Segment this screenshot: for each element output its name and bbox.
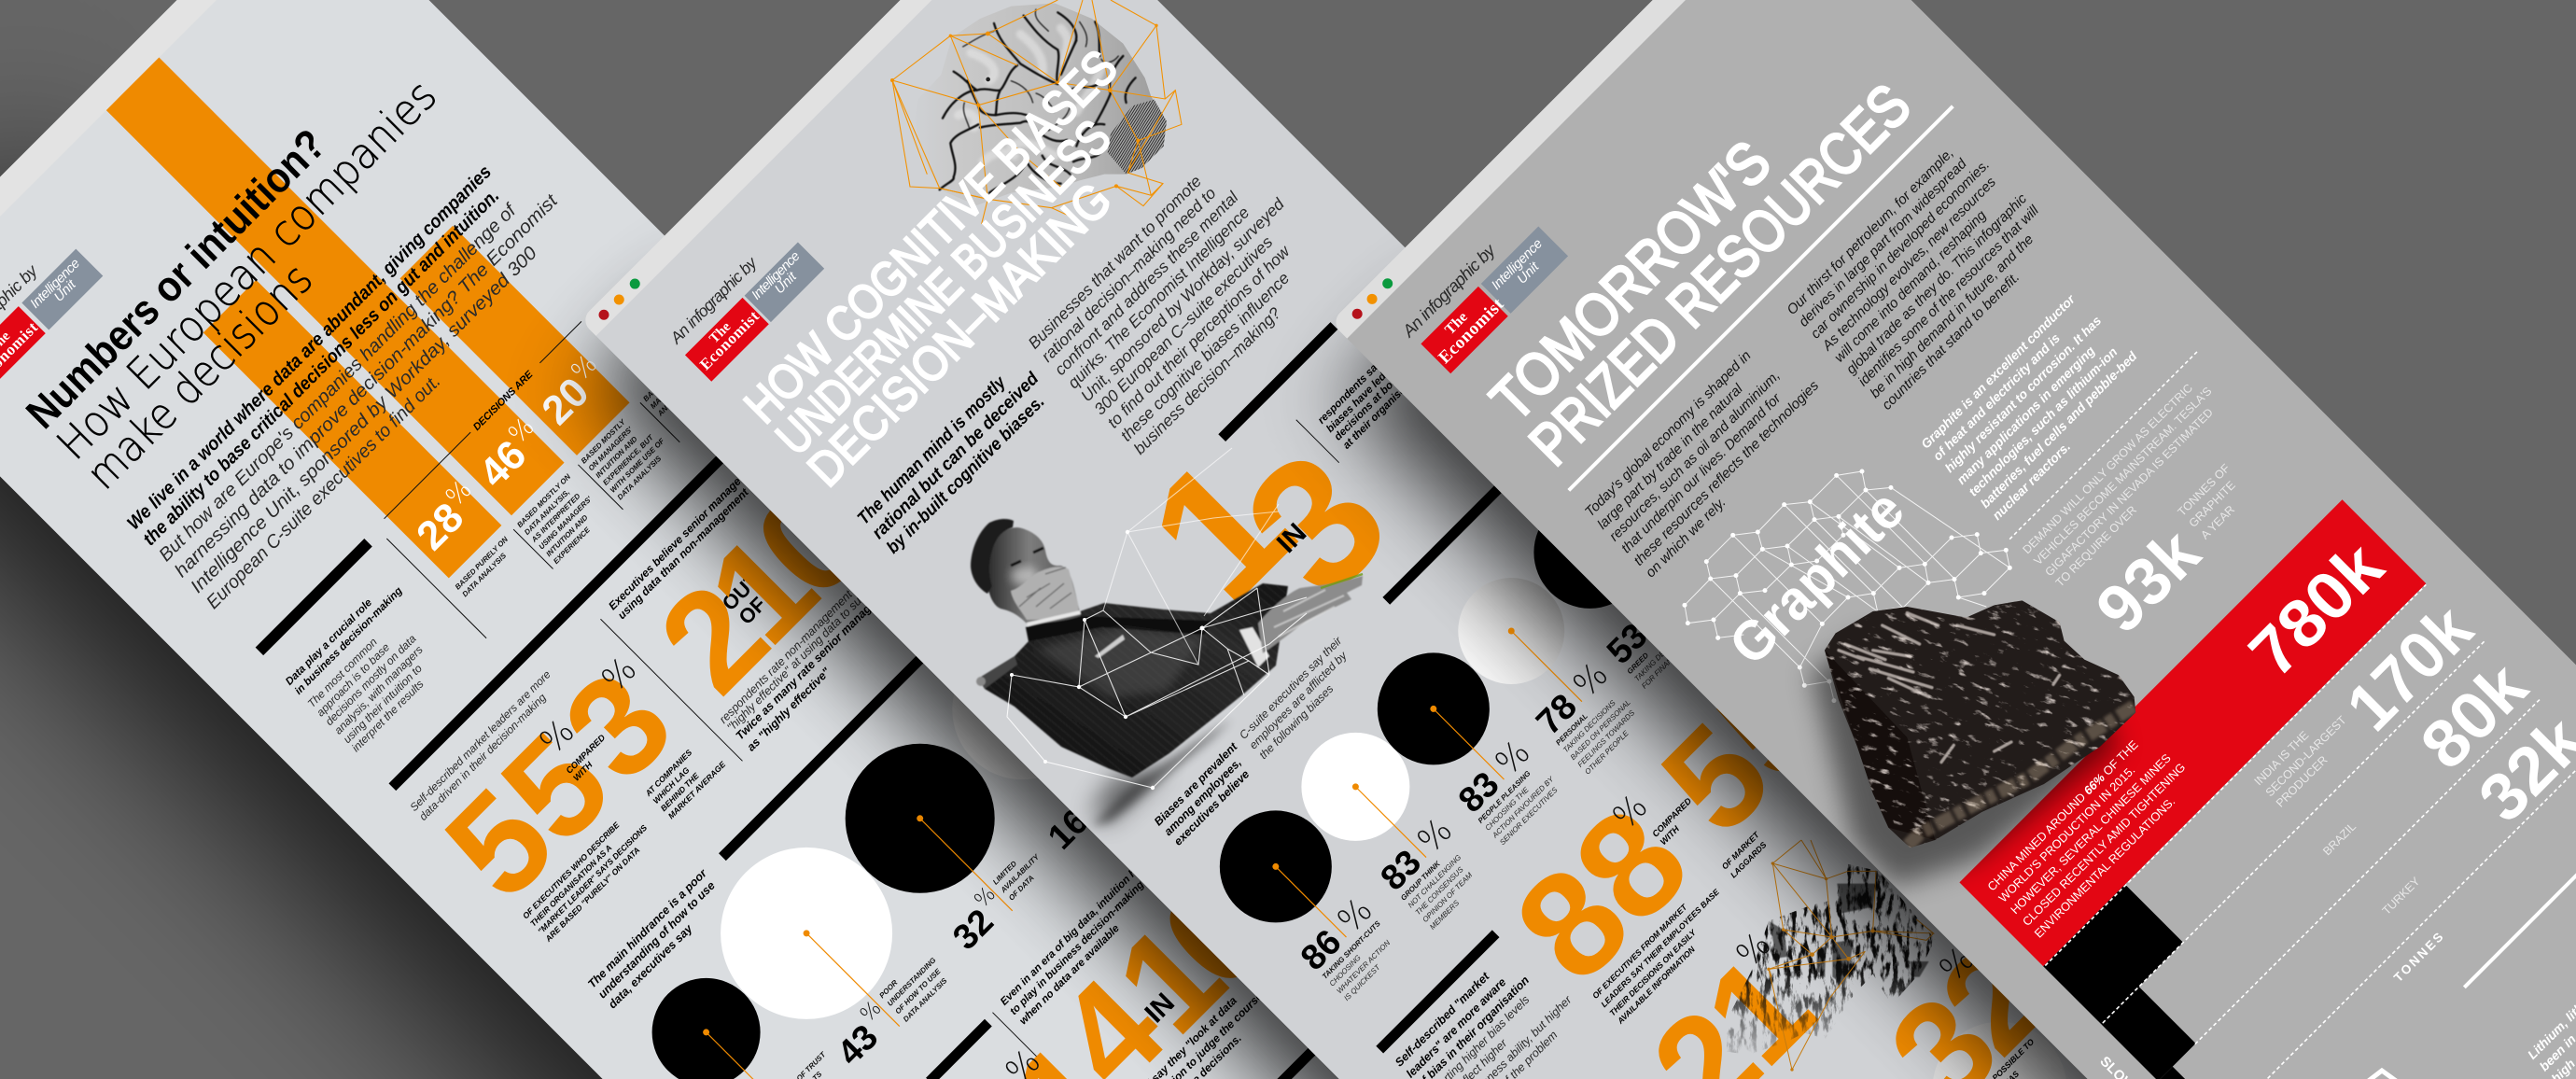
big stat: 21 percent: %: [1729, 925, 1779, 974]
big stat: 32 percent: 2: [1911, 915, 2079, 1079]
title: make decisions: [77, 254, 322, 499]
image: mountain: [1727, 840, 1935, 1072]
page background: [1331, 0, 2576, 1079]
chart: bias circles: %: [1331, 890, 1380, 941]
text: data play a crucial role: [284, 576, 462, 754]
text: market leaders aware: Self-described "market: [1393, 969, 1492, 1070]
chart: bias circles: 83: [1451, 764, 1507, 820]
labels: bias names: FEELINGS TOWARDS: [1576, 708, 1637, 769]
text: intro: But how are Europe's companies handling the challenge of: [155, 199, 522, 566]
big stat: 55 compared with 3: "MARKET LEADER" SAYS DECISIONS: [536, 823, 649, 936]
labels: bias names: IS QUICKEST: [1342, 962, 1382, 1002]
big stat: 21 percent: [1622, 916, 1854, 1079]
browser bar: [581, 0, 1044, 336]
image: businessman: [971, 448, 1363, 826]
big stat: 2 out of 10: "highly effective" at using data to support: [724, 575, 883, 734]
big stat: 88 compared with 55: OF EXECUTIVES FROM MARKET: [1590, 902, 1689, 1001]
text: intro column one: resources, such as oil and aluminium,: [1606, 368, 1784, 544]
logo: Economist: Intelligence: [28, 256, 83, 312]
text: graphite description: highly resistant to corrosion. It has: [1942, 314, 2104, 475]
big stat: 1 in 3: IN: [1271, 517, 1312, 559]
stat row: Turkey 32k: TURKEY: [2380, 875, 2423, 918]
text: intro: the ability to base critical decisions less on gut and intuition.: [139, 186, 504, 550]
text: data play a crucial role: Data play a crucial role: [284, 596, 375, 688]
title: UNDERMINE BUSINESS: [766, 110, 1121, 466]
big stat: 55 compared with 3: BEHIND THE: [659, 770, 702, 813]
labels: bias names: OTHER PEOPLE: [1583, 729, 1631, 777]
big stat: 55 compared with 3: THEIR ORGANISATION AS A: [528, 843, 614, 929]
text: data play a crucial role: using their intuition to: [341, 662, 425, 746]
chart: hindrance circles: OF HOW TO USE: [893, 967, 943, 1016]
captions under bars: DATA ANALYSIS,: [523, 488, 571, 537]
text: intro column two: global trade as they do. This infographic: [1843, 190, 2030, 377]
big stat: 2 out of 10: respondents rate non-management as: [717, 577, 866, 726]
big stat: 55 compared with 3: MARKET AVERAGE: [666, 759, 728, 820]
big stat: 88 compared with 55: [1484, 637, 1876, 1029]
logo: Economist: [685, 243, 824, 382]
text: graphite description: many applications in emerging: [1954, 343, 2098, 487]
big stat: 55 compared with 3: %: [533, 712, 582, 762]
thin divider: [992, 1013, 1112, 1079]
text: intro: Unit, sponsored by Workday, surveyed: [1077, 194, 1289, 405]
thick divider: [388, 456, 723, 791]
title: PRIZED RESOURCES: [1517, 71, 1924, 478]
text: main hindrance: understanding of how to use: [595, 879, 718, 1001]
labels: bias names: CHOOSING: [1328, 953, 1363, 988]
text: market leaders aware: [1393, 940, 1585, 1079]
text: data play a crucial role: in business decision-making: [293, 585, 405, 697]
captions under bars: ON MANAGERS': [587, 425, 635, 472]
big stat: 32 percent: %: [1932, 940, 1982, 989]
thick divider: [256, 539, 372, 655]
text: intro: 300 European C–suite executives: [1090, 232, 1277, 418]
text: graphite description: technologies, such as lithium-ion: [1966, 344, 2121, 499]
big stat: 55 compared with 3: OF EXECUTIVES WHO DESCRIBE: [521, 820, 622, 920]
big stat: 2 out of 10: 1: [679, 505, 847, 673]
labels: bias names: GREED: [1626, 651, 1650, 676]
panel: tomorrow's prized resources page: [1207, 0, 2576, 1079]
dashed rows: [2045, 584, 2576, 1079]
big stat: 2 out of 10: as "highly effective": [745, 665, 833, 754]
divider with heading: decisions are: [381, 318, 586, 524]
text: respondents say: respondents say: [1316, 357, 1385, 427]
big stat: 2 out of 10: using data than non-management: [615, 485, 751, 622]
big stat: 88 compared with 55: 5: [1687, 639, 1855, 807]
text: market leaders aware: leaders" are more aware: [1404, 975, 1508, 1079]
graphic: hexagon mesh: [1685, 471, 2009, 701]
big stat: 55 compared with 3: 5: [415, 760, 583, 928]
panel: cognitive biases page: [517, 0, 2493, 1079]
text: graphite description: of heat and electricity and is: [1930, 330, 2063, 463]
chart: bias circles: [1197, 473, 1708, 985]
big stat: 4 in 10: 1: [1086, 894, 1254, 1062]
logo: Economist: Unit: [772, 269, 801, 297]
captions under bars: BASED MOSTLY: [580, 417, 627, 466]
captions under bars: DATA ANALYSIS: [616, 454, 664, 501]
labels: bias names: MEMBERS: [1428, 898, 1462, 932]
text: intro: We live in a world where data are abundant, giving companies: [123, 161, 496, 534]
big stat: 55 compared with 3: 3: [534, 642, 702, 810]
shadow of third page: [1343, 294, 2439, 1079]
text: respondents say: at their organisation: [1341, 371, 1421, 452]
chart: hindrance circles: OF DATA: [1007, 874, 1036, 903]
page background: [0, 0, 1338, 1079]
text: intro: Businesses that want to promote: [1024, 172, 1205, 353]
title: TOMORROW'S: [1477, 128, 1784, 434]
image: brain: [890, 0, 1182, 224]
text: biases are prevalent: executives believe: [1171, 767, 1253, 848]
text: data play a crucial role: interpret the results: [349, 678, 427, 754]
big stat: 88 compared with 55: LAGGARDS: [1729, 840, 1769, 880]
big stat: 55 compared with 3: 5: [472, 704, 640, 872]
text: human mind: rational but can be deceived: [869, 369, 1043, 543]
captions under bars: EXPERIENCE, BUT: [601, 432, 656, 487]
big stat: 2 out of 10: 0: [725, 458, 893, 626]
logo: Economist: Economist: [696, 307, 763, 373]
text: data play a crucial role: approach is to base: [314, 640, 392, 719]
text: intro column one: on which we rely.: [1643, 495, 1729, 581]
thick divider: [1218, 322, 1337, 441]
stat row: Brazil 80k: BRAZIL: [2320, 820, 2359, 858]
chart: hindrance circles: %: [856, 997, 887, 1027]
browser bar: [1331, 0, 1799, 339]
stat row: India 170k: [2249, 591, 2487, 829]
labels: bias names: ACTION FAVOURED BY: [1491, 775, 1556, 840]
text: intro column two: Our thirst for petroleum, for example,: [1784, 145, 1957, 318]
shadow behind first page: [0, 154, 1804, 1079]
disc behind 32 percent: [1905, 994, 2094, 1079]
stat row: India 170k: 170k: [2333, 591, 2487, 745]
text: intro: Intelligence Unit, sponsored by Workday, surveyed 300: [187, 243, 541, 597]
browser dots: [1350, 276, 1394, 321]
big stat: 55 compared with 3: ARE BASED "PURELY" ON DATA: [543, 846, 642, 945]
stat row: India 170k: PRODUCER: [2274, 753, 2330, 810]
big stat: 55 compared with 3: COMPARED: [565, 733, 608, 777]
big stat: 88 compared with 55: OF MARKET: [1720, 830, 1761, 871]
text: era of big data: when no data are available: [1017, 922, 1122, 1027]
text: data play a crucial role: analysis, with managers: [331, 643, 426, 736]
captions under bars: AS INTERPRETED: [529, 492, 582, 544]
text: main hindrance: The main hindrance is a poor: [585, 866, 710, 990]
logo: Economist: Intelligence: [749, 249, 804, 303]
shadow of second page: [587, 284, 2079, 1079]
labels: bias names: CHOOSING THE: [1484, 785, 1531, 833]
text: respondents say: biases have led to poor: [1324, 343, 1417, 435]
chart: hindrance circles: %: [970, 882, 1001, 913]
text: intro column two: identifies some of the resources that will: [1855, 203, 2042, 389]
labels: bias names: BASED ON PERSONAL: [1569, 698, 1632, 762]
text: china mined: CLOSED RECENTLY AMID TIGHTENING: [2020, 760, 2188, 929]
values: percentages: 20: [533, 369, 598, 434]
chart: hindrance circles: POOR: [877, 978, 900, 1000]
big stat: 55 compared with 3: %: [595, 650, 644, 700]
text: intro column one: large part by trade in the natural: [1594, 381, 1746, 533]
captions under bars: USING MANAGERS': [538, 494, 595, 551]
chart: bias circles: 83: [1373, 843, 1429, 898]
logo: Economist: Intelligence: [1489, 236, 1546, 293]
big stat: 4 in 10: 0: [1132, 849, 1300, 1017]
text: intro column two: derives in large part from widespread: [1796, 156, 1970, 330]
chart: hindrance circles: DATA ANALYSIS: [902, 976, 949, 1024]
title: How European companies: [47, 70, 446, 469]
red band: [1959, 499, 2426, 966]
text: biases are prevalent: Biases are prevalent: [1152, 739, 1240, 828]
chart: hindrance circles: 16: [1041, 802, 1097, 858]
values: percentages: 28: [408, 495, 472, 559]
image: graphite rock: [1718, 486, 2245, 957]
text: c-suite executives: employees are afflicted by: [1247, 649, 1350, 751]
text: market leaders: data-driven in their decision-making: [416, 691, 549, 823]
text: demand: GIGAFACTORY IN NEVADA IS ESTIMATED: [2042, 406, 2216, 579]
white marker: [2366, 1071, 2399, 1079]
text: intro: business decision–making?: [1130, 303, 1284, 458]
text: intro: rational decision–making need to: [1038, 183, 1220, 366]
thick divider: [1382, 485, 1502, 605]
stat: 780k: 780k: [2235, 528, 2399, 691]
text: china mined: CHINA MINED AROUND 66% OF THE: [1984, 737, 2141, 893]
logo: Economist: The: [707, 319, 735, 346]
labels: bias names: PERSONAL: [1554, 712, 1589, 747]
big stat: 1 in 3: 1: [1110, 419, 1331, 639]
big stat: 88 compared with 55: %: [1605, 787, 1656, 837]
labels: bias names: OPINION OF TEAM: [1421, 871, 1474, 924]
labels: bias names: [1321, 615, 1715, 1010]
labels: bias names: TAKING SHORT-CUTS: [1321, 918, 1382, 981]
values: percentages: %: [503, 412, 540, 450]
big stat: 4 in 10: [1015, 847, 1311, 1079]
big stat: 88 compared with 55: 5: [1632, 694, 1800, 862]
labels: bias names: PEOPLE PLEASING: [1477, 769, 1533, 825]
chart: bias circles: 78: [1529, 687, 1585, 742]
thin divider: [600, 619, 742, 761]
captions under bars: DATA ANALYSIS: [461, 551, 509, 598]
logo: Economist: The: [1442, 309, 1471, 338]
chart: hindrance circles: LIMITED: [991, 859, 1018, 887]
thick divider: [719, 656, 923, 861]
labels: bias names: GROUP THINK: [1399, 859, 1443, 903]
big stat: 2 out of 10: Twice as many rate senior management: [734, 577, 899, 742]
stat row: India 170k: SECOND-LARGEST: [2263, 713, 2349, 799]
text: intro column two: be in high demand in future, and the: [1867, 231, 2037, 401]
text: demand: VEHICLES BECOME MAINSTREAM. TESLA'S: [2031, 385, 2215, 568]
big stat: 88 compared with 55: WITH: [1659, 823, 1683, 848]
labels: bias names: SENIOR EXECUTIVES: [1498, 785, 1560, 847]
panel: numbers or intuition page: [0, 0, 1338, 1079]
big stat: 55 compared with 3: [415, 632, 731, 946]
text: graphite description: batteries, fuel cells and pebble-bed: [1978, 349, 2140, 511]
text: intro: confront and address these mental: [1051, 187, 1242, 379]
logo: Economist: [1421, 227, 1568, 373]
big stat: 1 in 3: 3: [1206, 413, 1426, 634]
text: intro column one: Today's global economy is shaped in: [1582, 348, 1755, 520]
stat row: Turkey 32k: [2360, 702, 2576, 941]
text: era of big data: to play in business decision-making: [1008, 879, 1146, 1017]
text: demand: TO REQUIRE OVER: [2053, 503, 2139, 589]
page background: [581, 0, 2481, 1079]
text: human mind: The human mind is mostly: [854, 372, 1011, 528]
big stat: 2 out of 10: OUT: [718, 568, 765, 615]
text: market leaders: Self-described market leaders are more: [407, 667, 553, 814]
big stat: 88 compared with 55: THEIR DECISIONS ON EASILY: [1608, 927, 1699, 1017]
values: percentages: %: [566, 349, 603, 386]
chart: bias circles: 53: [1600, 616, 1656, 672]
text: main hindrance: data, executives say: [606, 921, 695, 1011]
logo: Economist: Economist: [1435, 294, 1508, 368]
text: tonnes of graphite: A YEAR: [2198, 503, 2237, 542]
big stat: 1 in 3: [1110, 368, 1426, 684]
thick dividers: [926, 872, 1315, 1079]
text: intro: these cognitive biases influence: [1116, 269, 1293, 445]
text: intro column one: these resources reflects the technologies: [1631, 377, 1822, 569]
logo: Economist: Unit: [51, 276, 79, 305]
text: graphite description: nuclear reactors.: [1990, 440, 2073, 523]
text: china mined: WORLD'S PRODUCTION IN 2015.: [1995, 763, 2137, 904]
text: c-suite executives: C-suite executives say their: [1237, 634, 1345, 742]
chart: bias circles: %: [1410, 811, 1460, 861]
chart: bias circles: %: [1566, 655, 1616, 705]
chart: bias circles: %: [1489, 733, 1538, 783]
text: c-suite executives: the following biases: [1256, 682, 1336, 762]
chart: hindrance circles: UNDERSTANDING: [886, 956, 938, 1008]
title rule: [1567, 105, 1954, 492]
dashed divider: [2009, 351, 2198, 540]
captions under bars: WITH SOME USE OF: [609, 436, 666, 495]
text: intro: harnessing data to improve decision-making? The Economist: [171, 189, 563, 582]
captions under bars: AND: [655, 400, 674, 418]
stat: 93k: 93k: [2082, 515, 2215, 648]
wire: orange mesh: [892, 0, 1182, 224]
browser bar: [0, 0, 217, 216]
big stat: 88 compared with 55: COMPARED: [1650, 796, 1694, 839]
text: tonnes of graphite: TONNES OF: [2176, 461, 2233, 519]
chart: bias circles: 86: [1294, 922, 1350, 978]
text: respondents say: decisions at board level: [1333, 348, 1427, 442]
big stat: 88 compared with 55: LEADERS SAY THEIR EMPLOYEES BASE: [1599, 887, 1722, 1009]
big stat: 88 compared with 55: AVAILABLE INFORMATION: [1615, 944, 1697, 1027]
labels: bias names: TAKING DECISIONS: [1561, 698, 1617, 754]
chart: hindrance circles: [608, 603, 1171, 1079]
labels: bias names: NOT CHALLENGING: [1407, 853, 1463, 909]
text: graphite description: Graphite is an excellent conductor: [1919, 292, 2079, 452]
text: intro column two: will come into demand, reshaping: [1831, 207, 1990, 366]
labels: bias names: THE CONSENSUS: [1414, 865, 1465, 917]
captions under bars: EXPERIENCE: [552, 525, 592, 566]
captions under bars: BASED PURELY ON: [454, 535, 510, 592]
title: Numbers or intuition?: [17, 119, 335, 438]
text: intro column two: car ownership in developed economies.: [1808, 157, 1993, 342]
text: human mind: by in-built cognitive biases.: [883, 392, 1049, 558]
text: tonnes of graphite: GRAPHITE: [2187, 479, 2238, 530]
text: respondents say: [1296, 323, 1436, 463]
stat row: Brazil 80k: [2304, 648, 2542, 886]
bar chart: decision bands: [106, 58, 629, 579]
big stat: 2 out of 10: 2: [630, 554, 798, 722]
text: era of big data: Even in an era of big data, intuition has a role: [999, 836, 1170, 1008]
divider with heading: decisions are: DECISIONS ARE: [471, 369, 536, 433]
text: intro: European C-suite executives to find out.: [203, 371, 445, 613]
text: china mined: HOWEVER, SEVERAL CHINESE MINES: [2008, 750, 2174, 917]
captions under bars: INTUITION AND: [544, 513, 590, 558]
big stat: 2 out of 10: Executives believe senior management are better at: [606, 408, 811, 612]
big stat: 55 compared with 3: WHICH LAG: [651, 765, 692, 806]
text: demand: DEMAND WILL ONLY GROW AS ELECTRIC: [2020, 382, 2195, 556]
text: data play a crucial role: The most common: [305, 635, 380, 710]
captions under bars: BASED: [641, 379, 666, 403]
big stat: 88 compared with 55: 8: [1543, 777, 1719, 953]
solid rule: [2463, 804, 2576, 988]
captions under bars: [386, 309, 720, 642]
labels: bias names: TAKING DECISIONS: [1632, 627, 1689, 683]
heading: Graphite: Graphite: [1717, 478, 1916, 677]
big stat: 55 compared with 3: AT COMPANIES: [643, 748, 693, 799]
text: intro column one: that underpin our lives. Demand for: [1618, 390, 1785, 556]
text: intro column two: countries that stand to benefit.: [1879, 270, 2023, 413]
text: intro: quirks. The Economist Intelligence: [1064, 203, 1253, 392]
values: percentages: 46: [470, 431, 535, 497]
big stat: 88 compared with 55: 8: [1484, 835, 1660, 1012]
text: biases are prevalent: among employees,: [1162, 756, 1244, 838]
text: intro: to find out their perceptions of how: [1103, 241, 1295, 431]
text: data play a crucial role: decisions mostly on data: [323, 632, 419, 728]
big stat: 4 in 10: IN: [1139, 988, 1181, 1029]
thick divider: [1376, 930, 1500, 1054]
captions under bars: MANAGERS: [649, 373, 686, 411]
labels: bias names: FOR FINANCIAL GAIN: [1640, 630, 1701, 691]
labels: bias names: WHATEVER ACTION: [1335, 938, 1392, 995]
text: an infographic by: An infographic by: [1398, 239, 1500, 342]
chart: hindrance circles: 32: [945, 902, 1001, 958]
axis label: tonnes: TONNES: [2391, 930, 2446, 985]
text: china mined: ENVIRONMENTAL REGULATIONS.: [2031, 794, 2177, 941]
text: an infographic by: An infographic by: [665, 253, 761, 348]
chart: hindrance circles: AVAILABILITY: [999, 852, 1042, 895]
logo: Economist: Unit: [1515, 259, 1543, 287]
wire: white mesh: [1007, 448, 1307, 788]
text: intro column two: As technology evolves, new resources: [1819, 174, 1999, 355]
logo: Economist: [0, 249, 103, 389]
shadow of rock: [1811, 635, 2119, 887]
captions under bars: BASED MOSTLY ON: [515, 472, 572, 529]
values: percentages: %: [441, 475, 478, 512]
chart: hindrance circles: 43: [831, 1017, 886, 1073]
big stat: 55 compared with 3: WITH: [571, 760, 595, 783]
big stat: 2 out of 10: OF: [734, 593, 771, 629]
browser dots: [596, 276, 642, 322]
big stat: 2 out of 10: [605, 408, 951, 754]
stat row: India 170k: INDIA IS THE: [2252, 729, 2311, 788]
captions under bars: INTUITION AND: [594, 435, 639, 480]
bar chart: black production bars: [2043, 885, 2292, 1079]
stat row: Brazil 80k: 80k: [2407, 648, 2542, 783]
values: percentages: [407, 349, 616, 559]
title: DECISION–MAKING: [798, 173, 1122, 497]
